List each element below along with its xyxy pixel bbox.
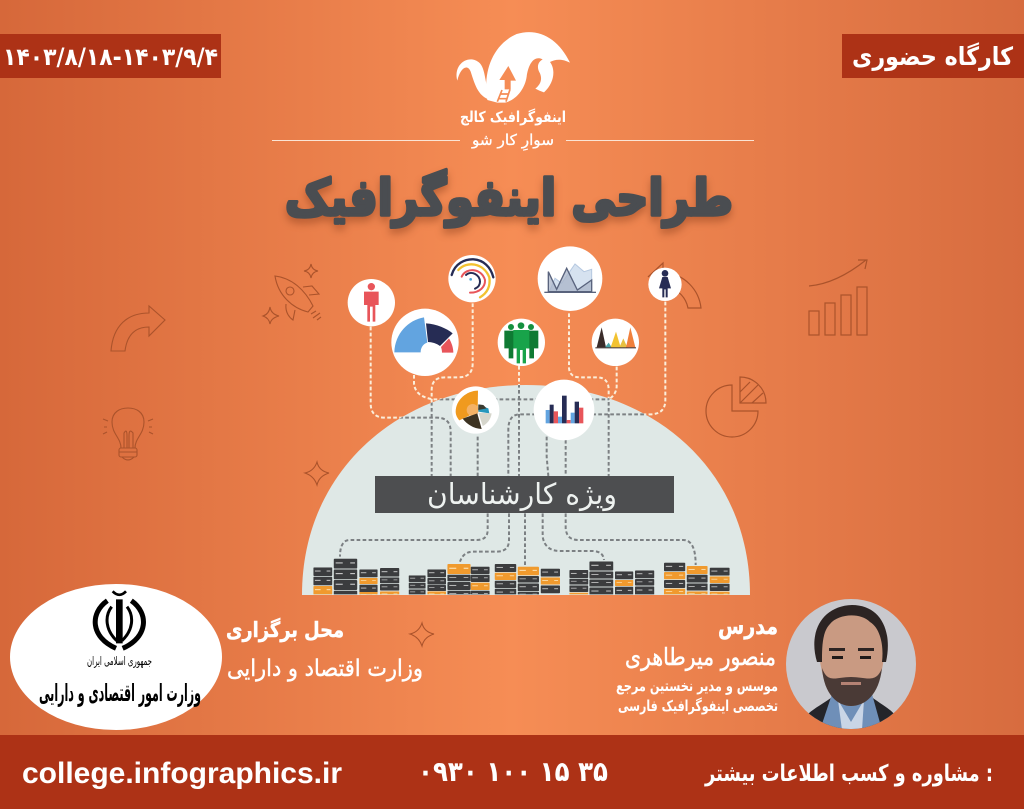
venue name: وزارت اقتصاد و دارایی (227, 656, 423, 682)
title: طراحی اینفوگرافیک (285, 169, 733, 228)
banner: specialists (375, 476, 674, 513)
footer phone: ۰۹۳۰ ۱۰۰ ۱۵ ۳۵ (418, 755, 608, 788)
connector lines in dome (339, 385, 697, 565)
badge: in-person workshop (842, 34, 1024, 78)
icon: sparkle bottom (410, 623, 434, 646)
circle: peaks chart (592, 319, 639, 366)
dome (302, 385, 750, 595)
emblem (95, 591, 143, 648)
logo wordmark: اینفوگرافیک کالج (460, 108, 566, 126)
footer url: college.infographics.ir (22, 757, 342, 790)
venue heading: محل برگزاری (226, 617, 344, 642)
instructor bio: تخصصی اینفوگرافیک فارسی (618, 697, 778, 715)
icon: background arc behind woman (648, 263, 701, 308)
icon: small stars (263, 264, 318, 324)
circle: bar chart (534, 380, 594, 440)
instructor bio (616, 677, 778, 715)
instructor name: منصور میرطاهری (625, 643, 776, 671)
instructor heading: مدرس (718, 614, 778, 640)
circle: area chart (538, 246, 602, 311)
icon: rocket (275, 276, 321, 320)
circle: woman (648, 268, 682, 301)
connector lines on orange (371, 302, 665, 418)
circle: round pie chart (452, 386, 499, 434)
instructor bio: موسس و مدیر نخستین مرجع (616, 677, 778, 695)
circle: fan chart (391, 309, 459, 376)
icon: curved arrow (111, 306, 165, 351)
server racks (313, 558, 730, 594)
circle: green people (498, 319, 545, 366)
badge: dates (0, 34, 221, 78)
icon: growth chart (809, 260, 867, 335)
icon: pie chart (706, 377, 766, 437)
icon: light bulb (103, 408, 153, 460)
venue emblem oval: وزارت امور اقتصادی و دارایی (39, 679, 201, 707)
footer band (0, 735, 1024, 809)
logo (457, 32, 570, 103)
venue emblem oval: جمهوری اسلامی ایران (87, 654, 152, 669)
instructor photo (786, 599, 916, 730)
venue emblem oval (10, 584, 222, 730)
slogan and rule: سوارِ کار شو (471, 131, 554, 152)
chart circles (348, 246, 682, 440)
badge: dates: ۱۴۰۳/۸/۱۸-۱۴۰۳/۹/۴ (3, 43, 218, 71)
banner: specialists: ویژه کارشناسان (427, 477, 617, 511)
circle: red person (348, 279, 395, 326)
circle: concentric arcs (448, 255, 496, 302)
icon: sparkle left (305, 462, 329, 485)
